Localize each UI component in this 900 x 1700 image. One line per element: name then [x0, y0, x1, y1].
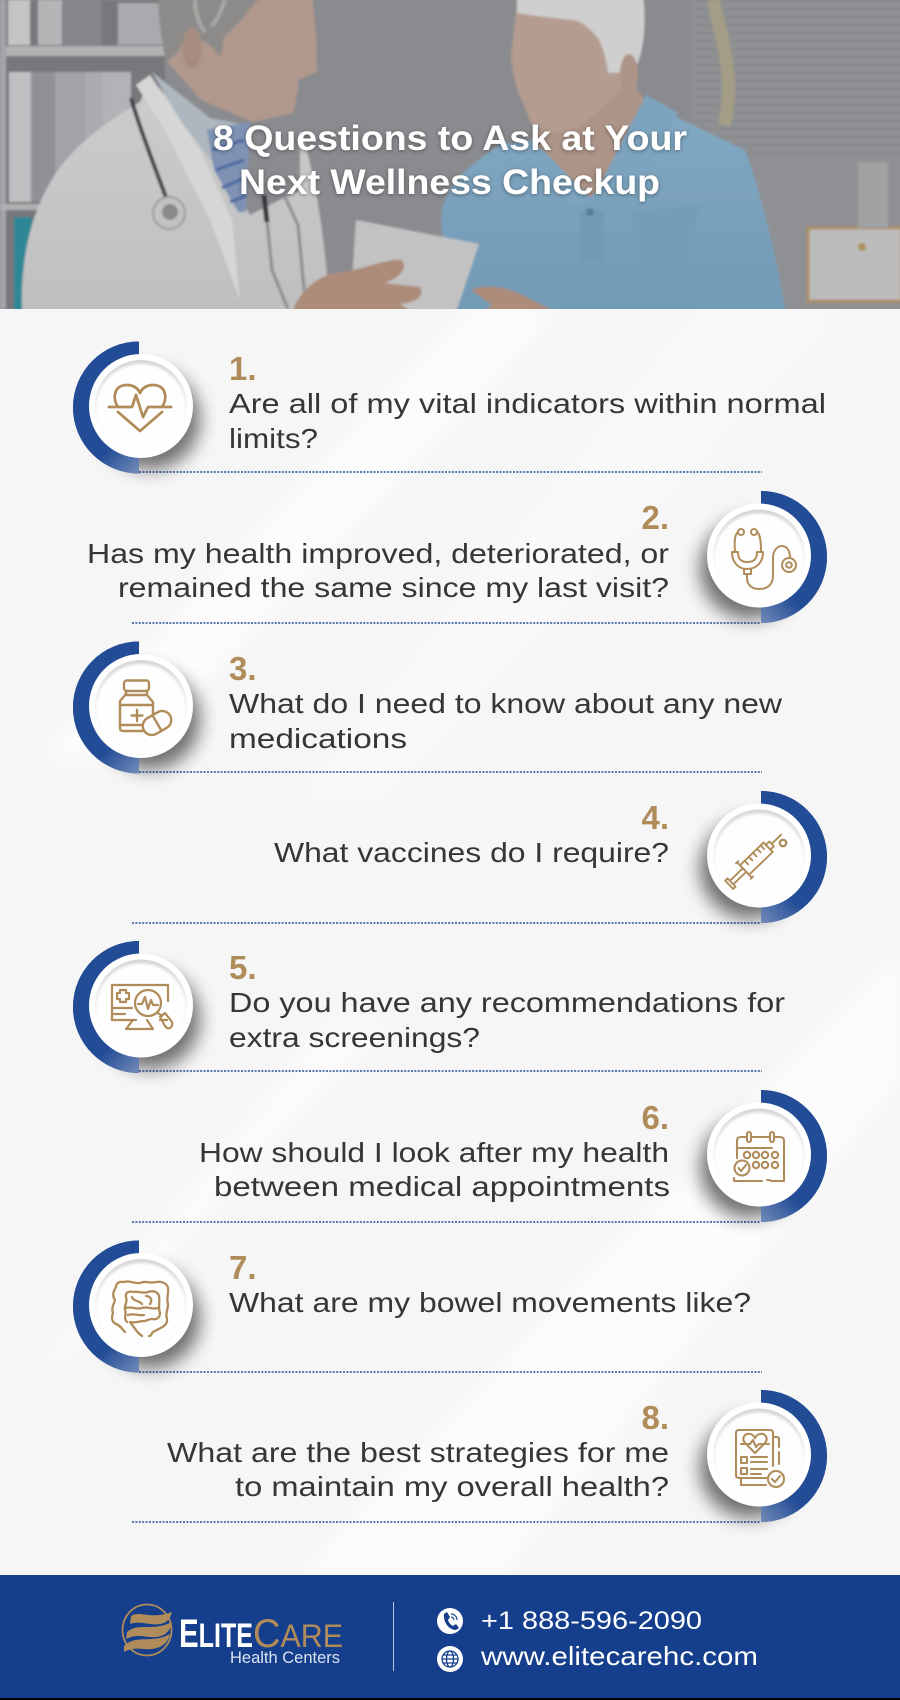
question 5 [73, 941, 785, 1073]
number 5: 5. [229, 949, 257, 986]
number 4: 4. [641, 799, 669, 836]
patient collar [592, 95, 678, 200]
question 4 text: What vaccines do I require? [274, 837, 669, 868]
number 8: 8. [641, 1399, 669, 1436]
logo tagline: Health Centers [230, 1648, 340, 1667]
question 3 text [229, 688, 783, 754]
footer band [0, 1575, 900, 1700]
badge 3: medicine bottle icon [73, 642, 200, 774]
question 5 text: extra screenings? [229, 1022, 480, 1053]
shelves [0, 0, 165, 309]
certificate frame [808, 228, 900, 301]
number 7: 7. [229, 1249, 257, 1286]
page background [0, 309, 900, 1575]
question 5 text: Do you have any recommendations for [229, 987, 785, 1018]
question 1 text: Are all of my vital indicators within normal [229, 388, 826, 419]
patient neck [534, 70, 646, 197]
question 1 text [229, 388, 826, 454]
question 7 text: What are my bowel movements like? [229, 1287, 751, 1318]
question 3 [73, 642, 783, 774]
question 2 [87, 491, 827, 623]
patient hand [471, 287, 556, 312]
question 8 [132, 1390, 827, 1522]
question 6 text [199, 1137, 670, 1202]
question 4 [132, 791, 827, 923]
title: Next Wellness Checkup [239, 163, 660, 202]
doctor head [166, 0, 317, 122]
question 8 text: What are the best strategies for me [167, 1437, 669, 1468]
question 1 [73, 342, 826, 474]
website: www.elitecarehc.com [480, 1641, 758, 1671]
title [213, 119, 687, 202]
logo [122, 1604, 343, 1667]
badge 2: stethoscope icon [700, 491, 827, 623]
badge 7: intestine icon [73, 1240, 200, 1372]
badge 6: calendar icon [700, 1090, 827, 1222]
question 6 [132, 1090, 827, 1222]
number 1: 1. [229, 350, 257, 387]
tie [207, 122, 250, 212]
patient shirt [441, 103, 786, 312]
badge 4: syringe icon [700, 791, 827, 923]
icon: phone [437, 1608, 463, 1634]
question 3 text: What do I need to know about any new [229, 688, 783, 719]
number 2: 2. [641, 499, 669, 536]
icon: globe [437, 1646, 463, 1672]
number 6: 6. [641, 1099, 669, 1136]
question 3 text: medications [229, 723, 407, 754]
question 5 text [229, 987, 785, 1053]
question 8 text: to maintain my overall health? [235, 1471, 669, 1502]
question 2 text [87, 538, 669, 603]
badge 5: monitor with magnifier icon [73, 941, 200, 1073]
question 2 text: Has my health improved, deteriorated, or [87, 538, 669, 569]
logo wordmark: ELITE [179, 1612, 253, 1656]
title: 8 Questions to Ask at Your [213, 119, 687, 158]
question 7 [73, 1240, 762, 1372]
logo: CARE [253, 1612, 343, 1656]
badge 1: heart rate icon [73, 342, 200, 474]
doctor hand [292, 260, 422, 312]
question 6 text: How should I look after my health [199, 1137, 669, 1168]
badge 8: medical report icon [700, 1390, 827, 1522]
spine model [713, 0, 729, 125]
footer divider [393, 1602, 394, 1671]
question 1 text: limits? [229, 423, 318, 454]
doctor shirt and collar [152, 72, 245, 215]
question 2 text: remained the same since my last visit? [118, 572, 669, 603]
logo emblem [122, 1604, 172, 1656]
patient face [511, 0, 640, 133]
number 3: 3. [229, 650, 257, 687]
question 6 text: between medical appointments [214, 1171, 670, 1202]
phone number: +1 888-596-2090 [481, 1607, 702, 1635]
header photo: doctor and patient [0, 0, 900, 315]
question 8 text [167, 1437, 669, 1502]
tablet [350, 220, 479, 312]
stethoscope [131, 98, 167, 200]
doctor coat [22, 78, 330, 312]
